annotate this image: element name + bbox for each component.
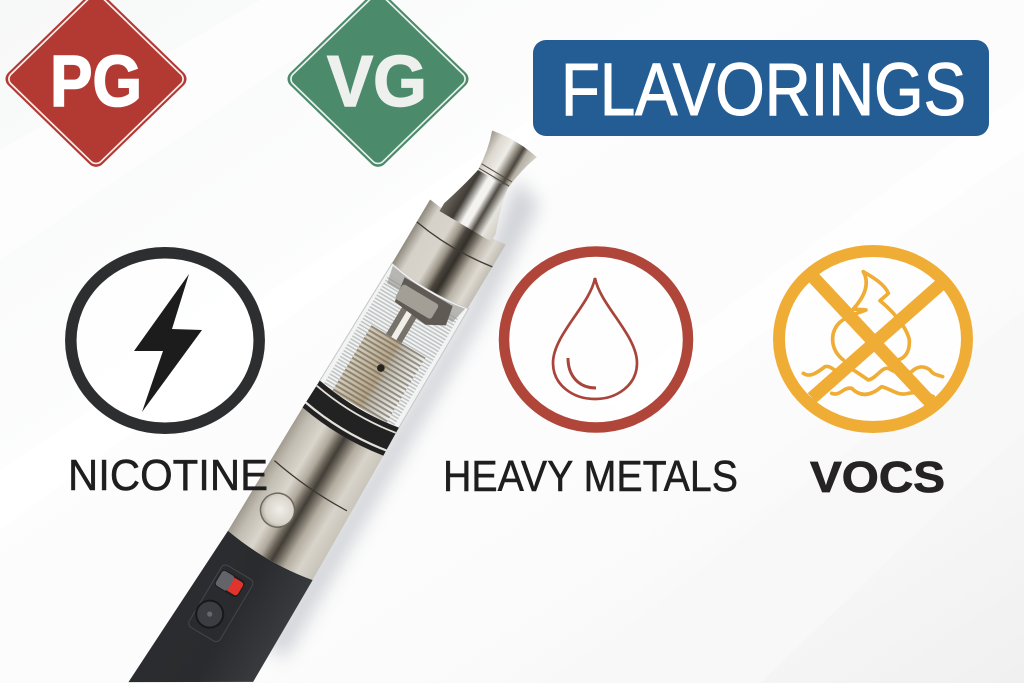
- glass top shade: [384, 266, 465, 324]
- black grip: [128, 526, 314, 683]
- VG diamond badge: [284, 0, 472, 170]
- nicotine label: NICOTINE: [68, 451, 268, 500]
- mouthpiece: [440, 126, 542, 242]
- VG diamond badge: VG: [327, 42, 427, 122]
- Flavorings label: FLAVORINGS: [561, 48, 966, 131]
- vape device: [128, 113, 560, 683]
- black band: [301, 380, 400, 459]
- tank: [318, 262, 470, 430]
- PG diamond badge: [2, 0, 190, 170]
- inner disc: [394, 278, 453, 326]
- fire button: [260, 492, 295, 528]
- vocs label: VOCS: [810, 453, 945, 502]
- heavy metals label: HEAVY METALS: [443, 452, 738, 501]
- icon: heavy metals droplet: [504, 252, 688, 428]
- PG diamond badge: PG: [50, 42, 142, 122]
- inner stem: [386, 307, 416, 343]
- heating coil: [332, 325, 426, 424]
- lower steel section: [226, 404, 388, 584]
- device shadow: [270, 179, 544, 660]
- control panel: [187, 563, 255, 643]
- steel collar: [390, 199, 506, 312]
- device body: [128, 113, 560, 683]
- icon: nicotine lightning bolt: [71, 253, 259, 428]
- icon: VOCs prohibited flame: [779, 251, 967, 427]
